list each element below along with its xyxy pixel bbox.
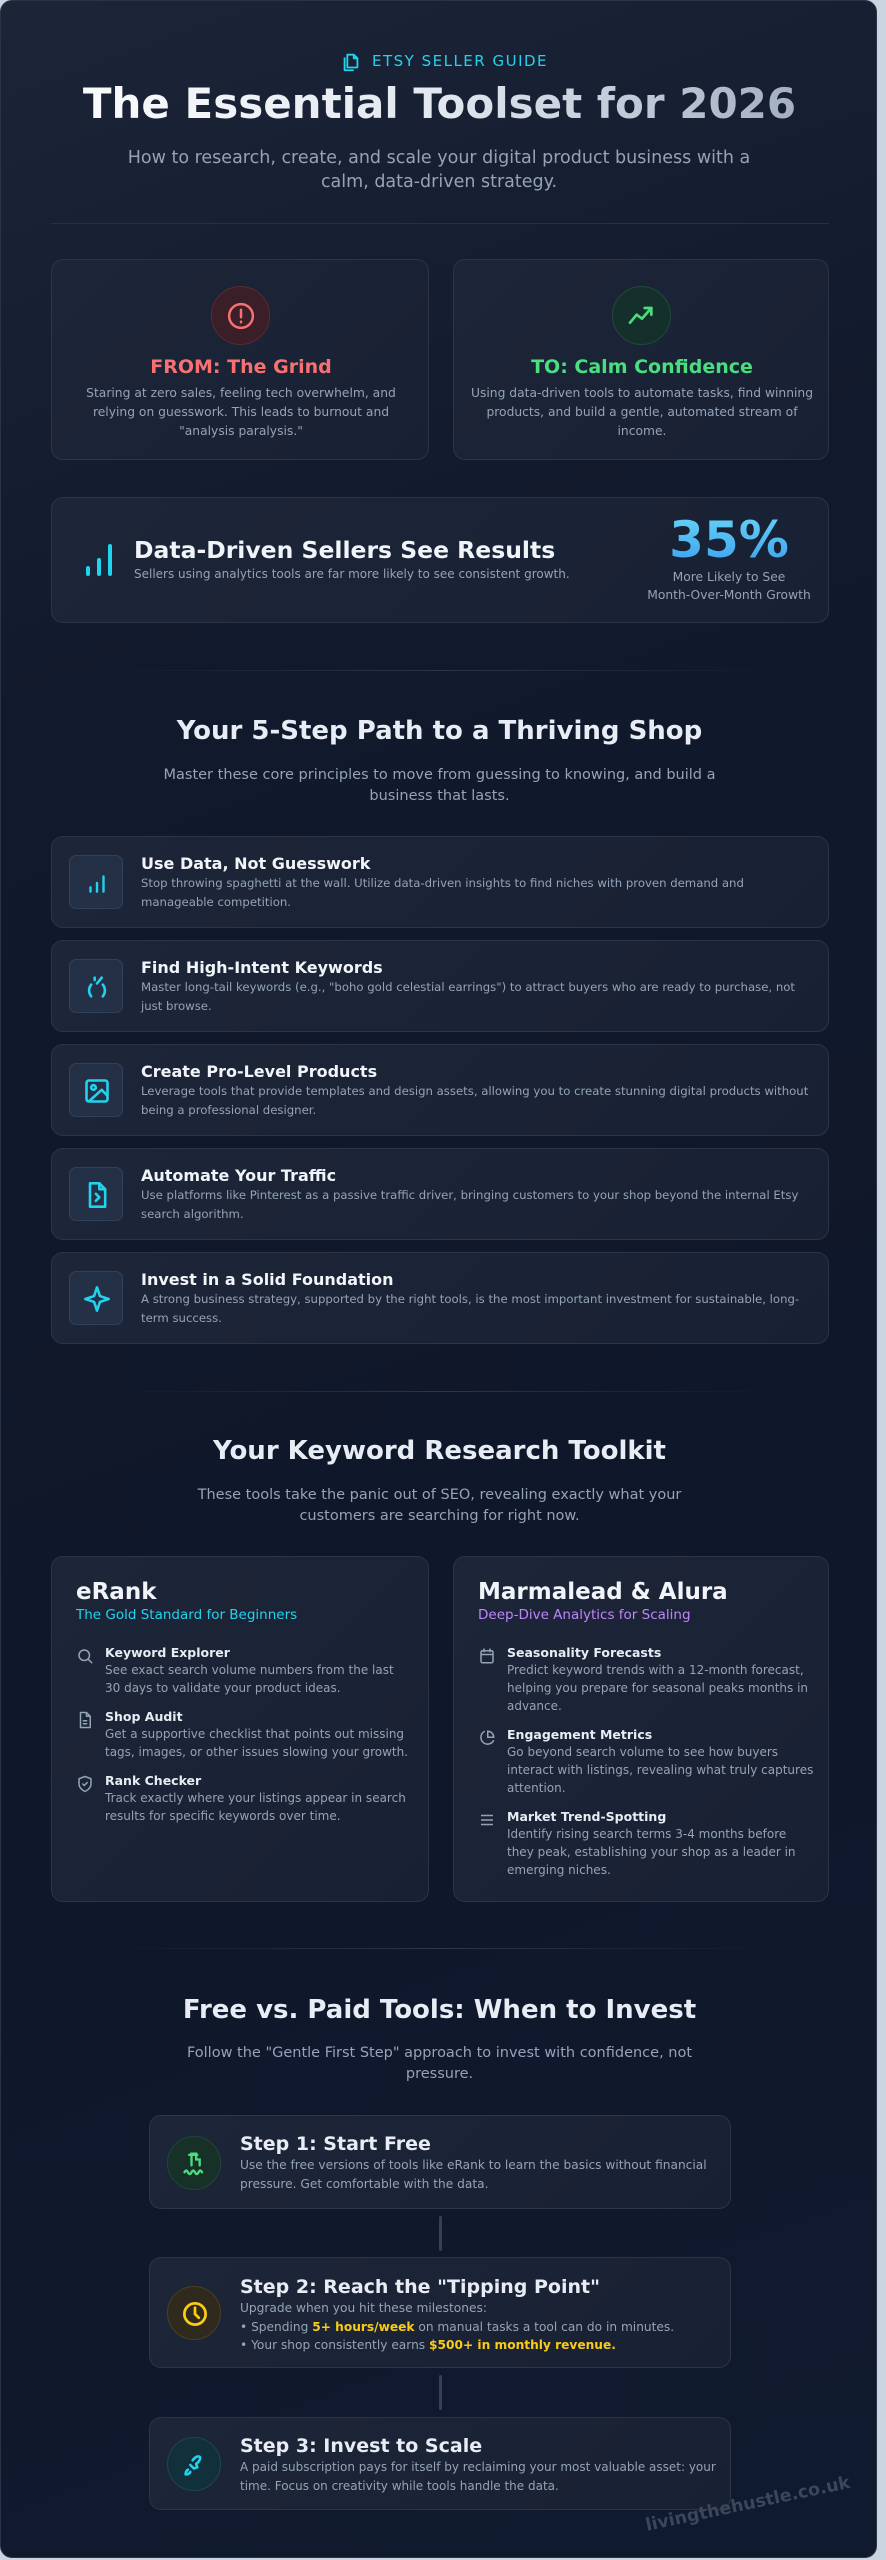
- step 2: Master long-tail keywords (e.g., "boho gold celestial earrings") to attract buyers who are ready to purchase, not just browse.: [141, 980, 795, 1012]
- text: Using data-driven tools to automate tasks, find winning products, and build a gentle, automated stream of income.: [471, 386, 813, 438]
- step 1 free: [149, 2115, 731, 2209]
- step 4: Use platforms like Pinterest as a passive traffic driver, bringing customers to your shop beyond the internal Etsy search algorithm.: [141, 1188, 798, 1220]
- icon: file: [69, 1167, 123, 1221]
- item: trend-spotting: Identify rising search terms 3-4 months before they peak, establishing your shop as a leader in emerging niches.: [507, 1827, 796, 1877]
- step list: [51, 836, 829, 1344]
- subtitle: How to research, create, and scale your digital product business with a calm, data-driven strategy.: [128, 148, 750, 192]
- item: shop audit: [80, 1709, 408, 1759]
- stat 35%: Month-Over-Month Growth: [647, 588, 811, 602]
- item: seasonality: Predict keyword trends with a 12-month forecast, helping you prepare for seasonal peaks months in advance.: [507, 1663, 808, 1713]
- step 2: [51, 940, 829, 1032]
- subtitle: Follow the "Gentle First Step" approach to invest with confidence, not pressure.: [187, 2045, 692, 2082]
- step 1: Use Data, Not Guesswork: [141, 854, 370, 873]
- stat 35%: [647, 511, 811, 602]
- panel: Marmalead & Alura: Deep-Dive Analytics for Scaling: [478, 1607, 691, 1623]
- item: trend-spotting: Market Trend-Spotting: [507, 1809, 666, 1824]
- step 2 tipping point: • Spending 5+ hours/week on manual tasks a tool can do in minutes.: [240, 2320, 674, 2334]
- step 3: Create Pro-Level Products: [141, 1062, 377, 1081]
- panel: eRank: [51, 1556, 429, 1902]
- subtitle: Master these core principles to move from guessing to knowing, and build a business that lasts.: [164, 767, 715, 804]
- heading: 5-step path: Your 5-Step Path to a Thriving Shop: [177, 716, 702, 746]
- step 2 tipping point: [149, 2257, 731, 2368]
- item: trend-spotting: [481, 1809, 796, 1877]
- subtitle: These tools take the panic out of SEO, revealing exactly what your customers are searching for right now.: [198, 1487, 681, 1524]
- heading: free vs paid: Free vs. Paid Tools: When to Invest: [183, 1995, 696, 2025]
- panel: stat: [51, 497, 829, 623]
- item: rank checker: Rank Checker: [105, 1773, 201, 1788]
- step 5: Invest in a Solid Foundation: [141, 1270, 394, 1289]
- step 5: [51, 1252, 829, 1344]
- icon: bars: [86, 544, 112, 576]
- item: keyword explorer: Keyword Explorer: [105, 1645, 230, 1660]
- step 3: Leverage tools that provide templates and design assets, allowing you to create stunning digital products without being a professional designer.: [141, 1084, 808, 1116]
- step 1 free: Use the free versions of tools like eRank to learn the basics without financial pressure. Get comfortable with the data.: [240, 2158, 707, 2190]
- step 1: Stop throwing spaghetti at the wall. Utilize data-driven insights to find niches with proven demand and manageable competition.: [141, 876, 744, 908]
- icon: alert: [211, 286, 270, 345]
- step 2 tipping point: • Your shop consistently earns $500+ in monthly revenue.: [240, 2338, 616, 2352]
- step 2: Find High-Intent Keywords: [141, 958, 383, 977]
- panel: Marmalead & Alura: Marmalead & Alura: [478, 1579, 728, 1605]
- item: keyword explorer: [78, 1645, 394, 1695]
- watermark: livingthehustle.co.uk: [644, 2473, 852, 2536]
- item: rank checker: Track exactly where your listings appear in search results for specific keywords over time.: [105, 1791, 406, 1823]
- arrow connector: [439, 2375, 442, 2410]
- item: rank checker: [78, 1773, 406, 1823]
- step 2 tipping point: Step 2: Reach the "Tipping Point": [240, 2276, 600, 2298]
- step 3 invest: A paid subscription pays for itself by reclaiming your most valuable asset: your time. Focus on creativity while tools handle the data.: [240, 2460, 716, 2492]
- panel: eRank: eRank: [76, 1579, 156, 1605]
- icon: clock: [167, 2286, 221, 2340]
- icon: sparkle: [69, 1271, 123, 1325]
- panel: eRank: The Gold Standard for Beginners: [76, 1607, 297, 1623]
- item: engagement: [480, 1727, 813, 1795]
- icon: target: [69, 959, 123, 1013]
- text: Sellers using analytics tools are far more likely to see consistent growth.: [134, 567, 570, 581]
- icon: copy: [344, 54, 358, 72]
- icon: trend: [612, 286, 671, 345]
- item: engagement: Engagement Metrics: [507, 1727, 652, 1742]
- icon: rocket: [167, 2437, 221, 2491]
- item: keyword explorer: See exact search volume numbers from the last 30 days to validate your product ideas.: [105, 1663, 394, 1695]
- title: The Essential Toolset for 2026: [83, 79, 796, 128]
- step 3: [51, 1044, 829, 1136]
- step 3 invest: [149, 2417, 731, 2510]
- icon: chart: [69, 855, 123, 909]
- step 5: A strong business strategy, supported by the right tools, is the most important investment for sustainable, long-term success.: [141, 1292, 799, 1324]
- icon: plant: [167, 2136, 221, 2190]
- panel: Marmalead & Alura: [453, 1556, 829, 1902]
- item: seasonality: Seasonality Forecasts: [507, 1645, 661, 1660]
- stat 35%: More Likely to See: [673, 570, 785, 584]
- panel: from the grind: [51, 259, 429, 460]
- item: shop audit: Shop Audit: [105, 1709, 183, 1724]
- panel: to calm confidence: [453, 259, 829, 460]
- icon: image: [69, 1063, 123, 1117]
- step 2 tipping point: Upgrade when you hit these milestones:: [240, 2301, 487, 2315]
- step 4: [51, 1148, 829, 1240]
- step 1: [51, 836, 829, 928]
- text: Staring at zero sales, feeling tech overwhelm, and relying on guesswork. This leads to burnout and "analysis paralysis.": [86, 386, 396, 438]
- header label: ETSY SELLER GUIDE: [372, 52, 548, 70]
- heading: TO: Calm Confidence: [531, 356, 753, 378]
- arrow connector: [439, 2216, 442, 2251]
- item: seasonality: [480, 1645, 808, 1713]
- stat 35%: 35%: [669, 511, 789, 569]
- item: shop audit: Get a supportive checklist that points out missing tags, images, or other issues slowing your growth.: [105, 1727, 408, 1759]
- heading: keyword toolkit: Your Keyword Research Toolkit: [213, 1436, 666, 1466]
- heading: Data-Driven Sellers See Results: [134, 536, 555, 564]
- item: engagement: Go beyond search volume to see how buyers interact with listings, revealing what truly captures attention.: [507, 1745, 813, 1795]
- step 3 invest: Step 3: Invest to Scale: [240, 2435, 482, 2457]
- step 1 free: Step 1: Start Free: [240, 2133, 431, 2155]
- step 4: Automate Your Traffic: [141, 1166, 336, 1185]
- heading: FROM: The Grind: [150, 356, 332, 378]
